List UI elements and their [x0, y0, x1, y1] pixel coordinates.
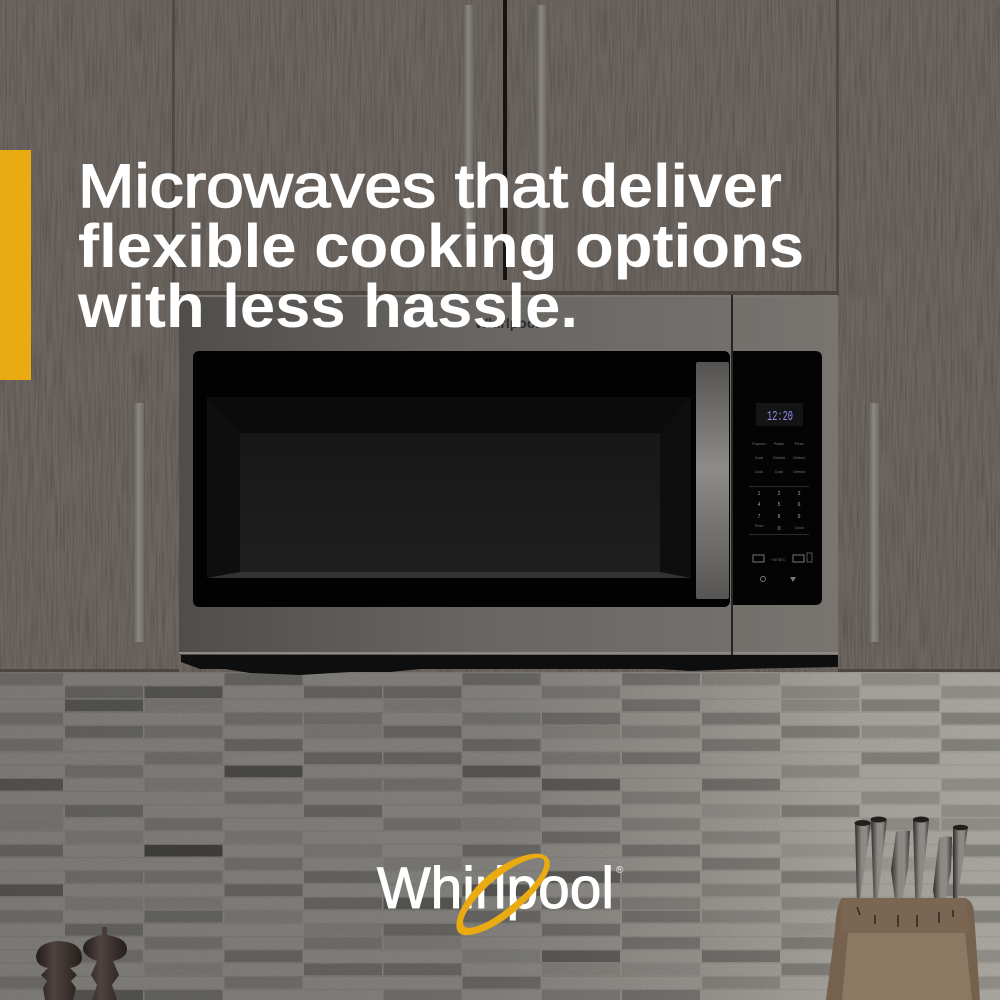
headline line 2: flexible cooking options [78, 212, 804, 280]
knives [854, 816, 968, 927]
keypad labels: Timer [754, 524, 764, 528]
mill right [83, 927, 127, 1000]
keypad labels: 5 [778, 502, 781, 508]
cabinet handle lower right [868, 403, 879, 642]
keypad labels: Cook [775, 470, 783, 474]
microwave body [179, 295, 838, 655]
headline line 1: Microwaves that [78, 152, 568, 220]
keypad labels: Reheat [773, 456, 785, 460]
microwave [179, 295, 838, 675]
logo swoosh [456, 854, 550, 935]
keypad labels: 3 [798, 491, 801, 497]
keypad labels: Potato [774, 442, 784, 446]
keypad labels: Clock [794, 526, 804, 530]
keypad labels: Popcorn [752, 442, 766, 446]
cabinet handle lower left [133, 403, 144, 642]
cabinet handle upper right [536, 5, 546, 245]
door handle [696, 362, 729, 599]
door window [193, 351, 730, 607]
tile backsplash [0, 672, 1000, 1000]
headline line 1 [78, 152, 782, 220]
keypad labels: 6 [798, 502, 801, 508]
registered mark: ® [616, 865, 624, 876]
whirlpool logo [377, 854, 624, 935]
keypad labels: 8 [778, 514, 781, 520]
accent bar [0, 150, 31, 380]
keypad labels: 9 [798, 514, 801, 520]
microwave brand mark: Whirlpool [475, 315, 539, 331]
keypad labels: Pizza [795, 442, 803, 446]
keypad labels: 1 [758, 491, 761, 497]
keypad labels [749, 442, 809, 535]
keypad labels: Cook [755, 456, 763, 460]
keypad labels: Defrost [793, 456, 805, 460]
headline line 3: with less hassle. [77, 272, 578, 340]
keypad labels: 4 [758, 502, 761, 508]
cabinet handle upper left [463, 5, 473, 245]
clock display [756, 403, 803, 426]
keypad labels: 0 [778, 526, 781, 532]
keypad labels: 2 [778, 491, 781, 497]
mill left [36, 941, 82, 1000]
clock display: 12:20 [767, 409, 793, 425]
keypad labels: Cook [755, 470, 763, 474]
logo wordmark: Whirlpool [377, 856, 614, 921]
pepper mills [36, 927, 127, 1000]
knife block [826, 816, 980, 1000]
keypad labels: 7 [758, 514, 761, 520]
headline line 1: deliver [580, 152, 782, 220]
cabinet seams [0, 0, 1000, 673]
cabinets background [0, 0, 1000, 673]
keypad labels: Defrost [793, 470, 805, 474]
microwave underside [181, 654, 838, 675]
wood block [826, 898, 980, 1000]
start and cancel buttons: +30 SEC [771, 558, 786, 562]
headline [77, 152, 804, 340]
control panel [733, 351, 822, 605]
start and cancel buttons [753, 553, 812, 582]
